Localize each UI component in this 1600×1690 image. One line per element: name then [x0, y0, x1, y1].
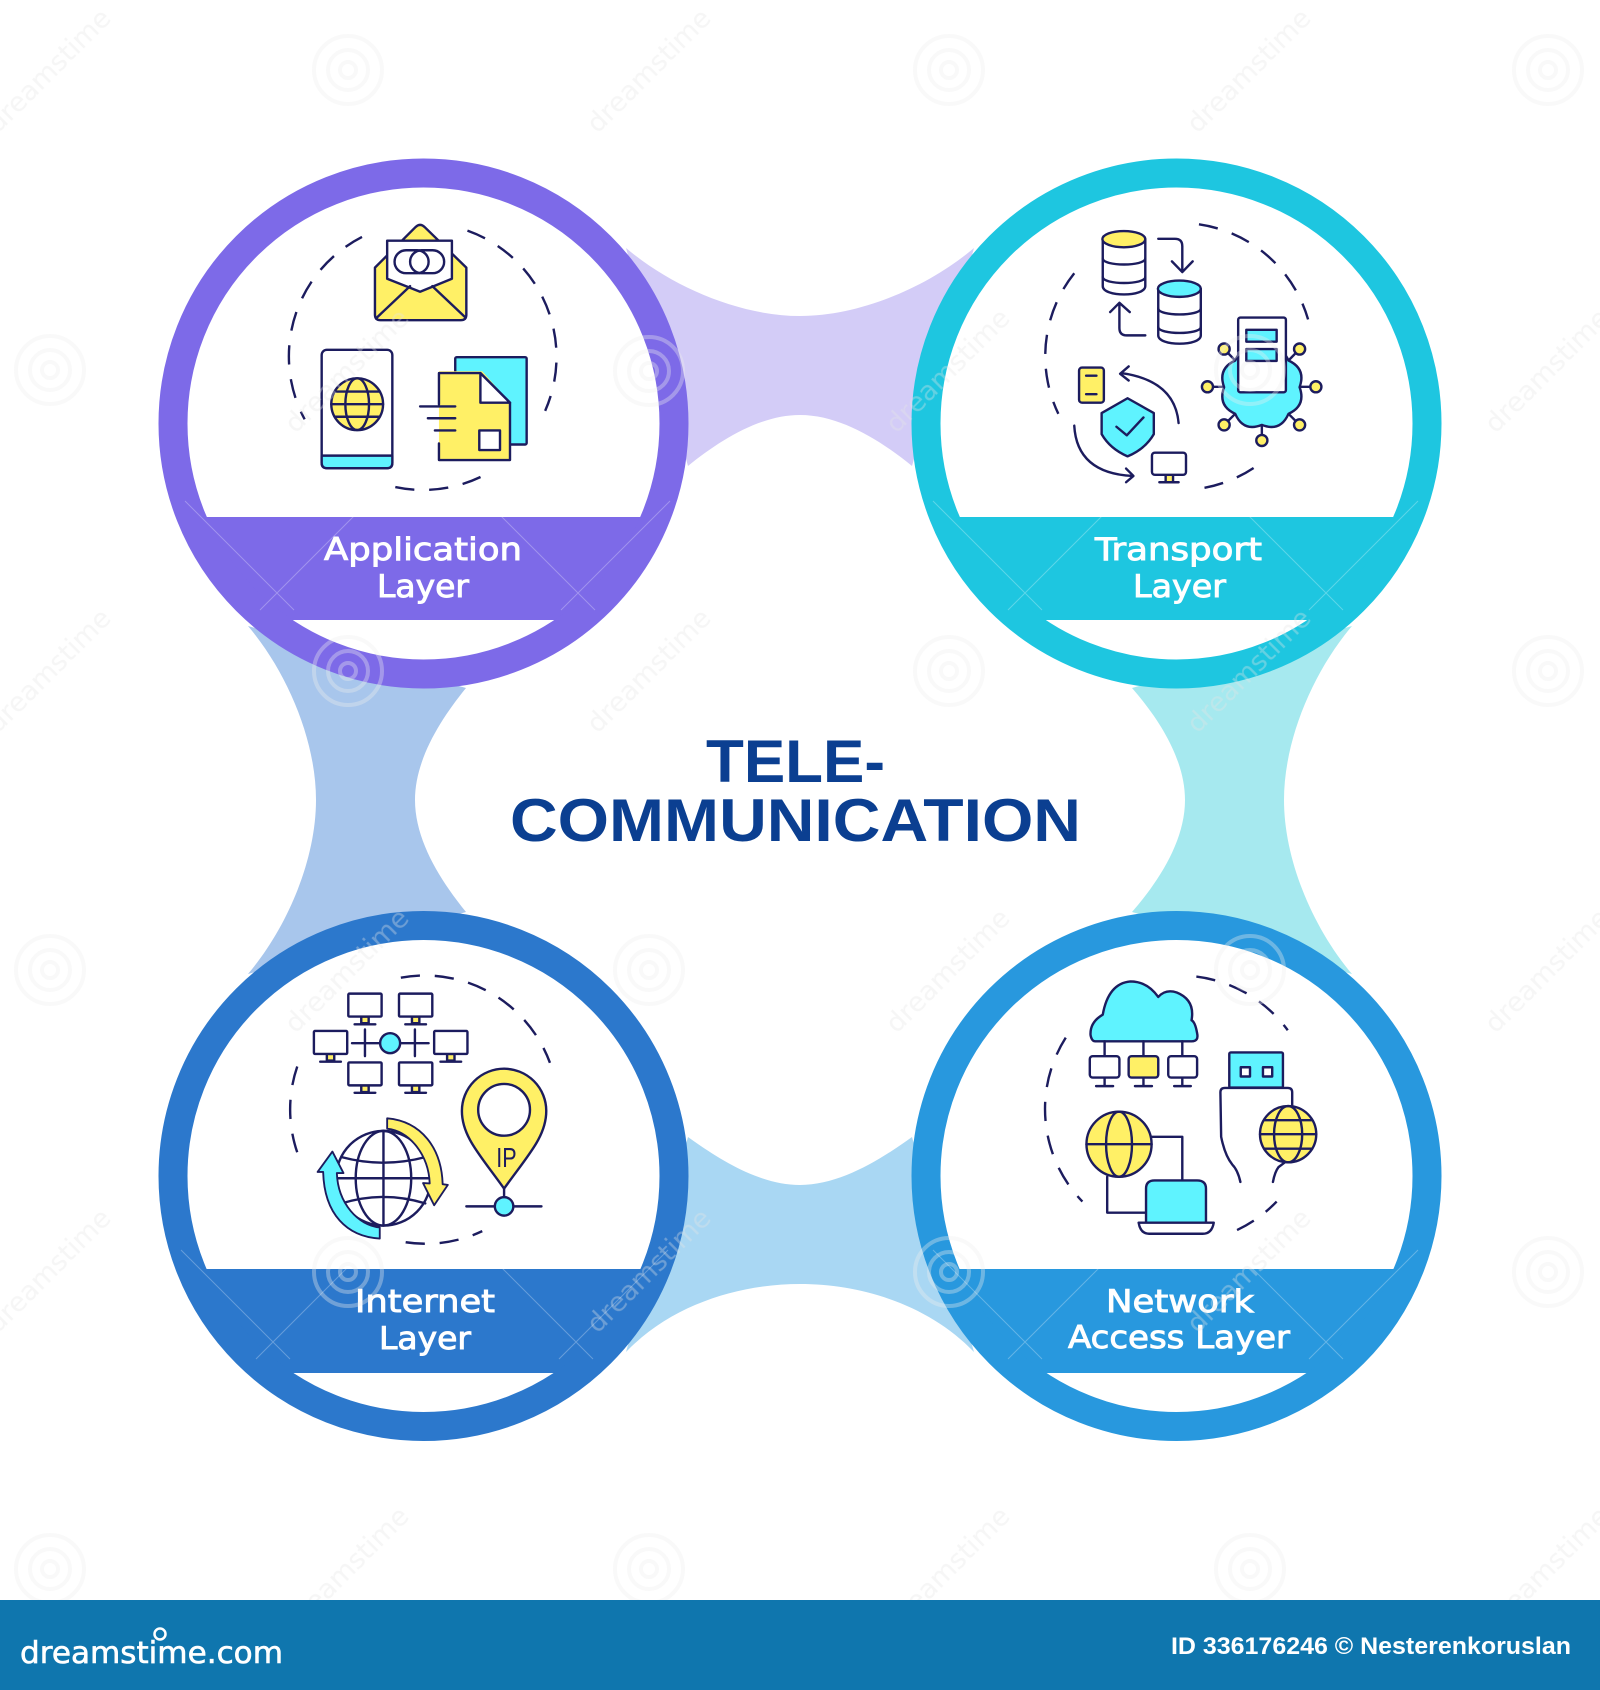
icon: usb with globe [1220, 1052, 1316, 1182]
icon: cloud network [1090, 981, 1197, 1086]
icon: IP location pin [462, 1069, 546, 1216]
icon: phone with globe [322, 350, 392, 468]
connector: application to internet [248, 626, 466, 974]
panel: Transport Layer [926, 172, 1428, 674]
icon: sending documents [420, 357, 527, 460]
watermark text: dreamstime [279, 903, 415, 1039]
icon: databases [1102, 231, 1201, 344]
label: Application Layer: Application [324, 532, 522, 568]
icon: computer network [314, 994, 467, 1093]
connector: internet to network access [626, 1137, 974, 1352]
label: Network Access Layer: Access Layer [1068, 1320, 1290, 1356]
panel: Network Access Layer [926, 925, 1428, 1427]
watermark text: dreamstime [1181, 3, 1317, 139]
icon: secure device exchange [1074, 366, 1186, 482]
watermark lattice lines [181, 501, 1418, 1359]
label: Transport Layer: Layer [1133, 569, 1226, 605]
title: COMMUNICATION [510, 787, 1081, 854]
footer credit: ID 336176246 © Nesterenkoruslan [1171, 1633, 1571, 1660]
watermark text: dreamstime [1181, 1203, 1317, 1339]
panel: Internet Layer [172, 925, 674, 1427]
watermark text: dreamstime [581, 603, 717, 739]
label: Transport Layer: Transport [1094, 532, 1262, 568]
watermark text: dreamstime [880, 1501, 1016, 1637]
watermark text: dreamstime [1181, 603, 1317, 739]
title: TELE- [706, 728, 885, 795]
icon: rotating globe [318, 1118, 448, 1239]
label: Network Access Layer [1068, 1284, 1290, 1356]
label: Application Layer [324, 532, 522, 605]
watermark text: dreamstime [279, 1501, 415, 1637]
text: IP: IP [496, 1142, 517, 1173]
watermark text: dreamstime [279, 303, 415, 439]
label: Network Access Layer: Network [1106, 1284, 1254, 1320]
label: Transport Layer [1094, 532, 1262, 605]
panel: Application Layer [172, 172, 674, 674]
label: Internet Layer [355, 1284, 495, 1357]
watermark text: dreamstime [581, 3, 717, 139]
connector: transport to network access [1132, 626, 1352, 974]
icon group: network access [1045, 977, 1316, 1234]
icon: envelope [375, 225, 466, 320]
title [510, 728, 1081, 854]
icon group: transport [1045, 224, 1321, 488]
watermark text: dreamstime [880, 903, 1016, 1039]
icon: globe and laptop [1086, 1112, 1214, 1234]
watermark text: dreamstime [581, 1203, 717, 1339]
icon group: internet [290, 976, 550, 1244]
connector: application to transport [626, 248, 974, 466]
icon group: application [289, 225, 557, 490]
label: Application Layer: Layer [377, 569, 469, 605]
watermark text: dreamstime [880, 303, 1016, 439]
icon: server on gear [1202, 318, 1321, 446]
footer bar [0, 1600, 1600, 1690]
label: Internet Layer: Layer [379, 1321, 471, 1357]
footer logo: dreamstime.com [20, 1636, 283, 1671]
label: Internet Layer: Internet [355, 1284, 495, 1320]
